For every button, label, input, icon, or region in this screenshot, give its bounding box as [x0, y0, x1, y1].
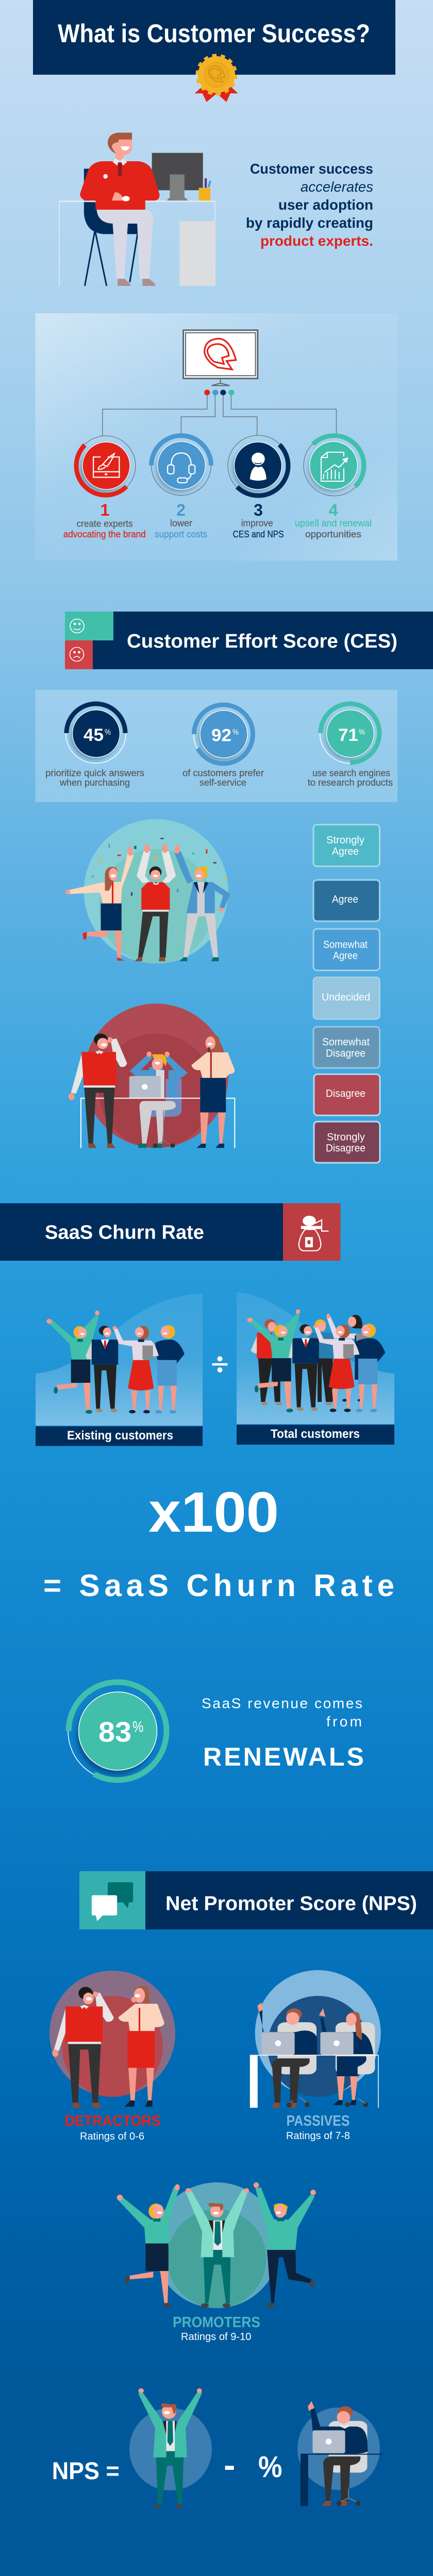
monitor and pencil cup	[152, 153, 211, 200]
renewals text: RENEWALS	[203, 1742, 364, 1771]
NPS title: Net Promoter Score (NPS)	[165, 1893, 417, 1915]
Undecided: Undecided	[322, 992, 370, 1003]
benefit 4 label	[295, 501, 372, 539]
icon: chat bubbles	[92, 1882, 133, 1921]
ring 4: upsell and renewal	[292, 423, 376, 508]
Somewhat Disagree: Somewhat	[322, 1037, 370, 1048]
back row man	[251, 1319, 282, 1405]
chair	[84, 168, 138, 286]
text block: customer success statement: by rapidly creating	[246, 215, 373, 231]
label: detractors: DETRACTORS	[64, 2113, 161, 2129]
icon: coffee grinder	[299, 1216, 328, 1251]
benefit 2 label: lower	[170, 518, 192, 529]
Disagree: Disagree	[326, 1088, 365, 1099]
title banner	[33, 0, 395, 75]
people: four customers	[46, 1311, 185, 1414]
benefit 1 label: 1	[101, 501, 109, 519]
people: seven customers	[247, 1309, 385, 1412]
illustration: man at desk	[59, 133, 215, 286]
Disagree	[314, 1074, 380, 1115]
text block: customer success statement: user adoption	[278, 197, 373, 213]
icon: medal	[195, 56, 238, 102]
Agree: Agree	[332, 894, 358, 905]
illustration: detractors	[49, 1971, 175, 2108]
woman cheering	[65, 846, 134, 961]
label: detractors: Ratings of 0-6	[80, 2131, 144, 2142]
frustrated man	[52, 1987, 114, 2108]
icon: sad face	[70, 647, 84, 662]
illustration: celebrating customers	[65, 819, 230, 963]
renewals text: from	[326, 1714, 362, 1730]
panel: existing customers: Existing customers	[67, 1429, 173, 1443]
stat: 71%: 71	[338, 725, 358, 745]
man with red vest	[69, 1033, 127, 1148]
desk outline	[81, 1098, 235, 1148]
stat: 83 percent from renewals: %	[132, 1719, 143, 1735]
stat: 45%: %	[105, 728, 111, 737]
label: passives	[286, 2113, 350, 2142]
front row	[247, 1309, 385, 1412]
benefit 2 label	[155, 501, 207, 539]
stat: 71%	[308, 703, 393, 788]
man promoter	[186, 2188, 249, 2308]
benefit 3 label: improve	[241, 518, 273, 529]
connector lines and dots	[103, 389, 336, 436]
illustration: frustrated customers	[69, 1004, 235, 1148]
renewals text: SaaS revenue comes	[202, 1696, 362, 1711]
panel: total customers: Total customers	[271, 1427, 360, 1441]
Somewhat Agree	[313, 929, 379, 971]
benefit 4 label: 4	[329, 501, 338, 519]
text block: customer success statement: Customer success	[250, 161, 373, 177]
text block: customer success statement: accelerates	[301, 179, 373, 195]
panel: total customers	[237, 1292, 394, 1445]
Somewhat Agree: Somewhat	[323, 939, 368, 951]
panel: existing customers	[36, 1293, 203, 1446]
Strongly Disagree: Disagree	[326, 1143, 365, 1154]
formula: minus sign	[225, 2466, 234, 2470]
heading: SaaS churn rate	[0, 1204, 340, 1261]
illustration: passives	[250, 1970, 381, 2108]
renewals text	[202, 1696, 364, 1771]
heading: net promoter score	[79, 1871, 433, 1929]
illustration: promoter in formula	[129, 2388, 212, 2508]
benefit 2 label: support costs	[155, 529, 207, 539]
woman biting nails	[191, 1035, 235, 1148]
benefit 4 label: opportunities	[305, 529, 361, 539]
benefit 1 label	[63, 501, 146, 539]
stat: 92%: of customers prefer	[182, 768, 264, 778]
stat: 71%: to research products	[308, 777, 393, 788]
formula: x100: x100	[148, 1481, 279, 1544]
man promoter right	[254, 2182, 316, 2307]
man	[80, 133, 160, 286]
stat: 92%: 92	[211, 726, 231, 745]
text block: customer success statement	[246, 161, 373, 249]
benefit 4 label: upsell and renewal	[295, 518, 372, 529]
label: promoters: Ratings of 9-10	[181, 2331, 252, 2343]
panel: benefits	[36, 313, 397, 561]
heading: customer effort score	[65, 612, 433, 669]
illustration: passive in formula	[297, 2401, 382, 2506]
icon: happy face	[70, 619, 84, 633]
title: What is Customer Success?	[58, 19, 370, 48]
benefit 2 label: 2	[176, 501, 186, 519]
benefit 1 label: create experts	[76, 518, 133, 529]
confetti	[92, 838, 227, 896]
stat: 83 percent from renewals	[68, 1682, 364, 1781]
first passive user	[257, 2003, 317, 2108]
stat: 45%: 45	[84, 725, 104, 745]
stat: 92%: self-service	[199, 777, 246, 788]
desk	[59, 200, 215, 286]
desk	[250, 2055, 378, 2108]
label: promoters: PROMOTERS	[173, 2314, 260, 2331]
back row woman	[326, 1314, 365, 1401]
stat: 45%: prioritize quick answers	[45, 768, 144, 778]
panel: CES statistics	[36, 690, 397, 802]
formula: equals SaaS churn rate: = SaaS Churn Rate	[43, 1568, 394, 1603]
Somewhat Disagree: Disagree	[326, 1048, 365, 1059]
ring 1: create experts	[64, 424, 147, 507]
Strongly Disagree	[314, 1122, 380, 1163]
stat: 83 percent from renewals: 83	[98, 1716, 131, 1748]
ring 2: lower support costs	[152, 436, 211, 496]
label: detractors	[64, 2113, 161, 2142]
label: passives: PASSIVES	[287, 2113, 349, 2129]
ring 3: improve CES and NPS	[216, 423, 301, 508]
back row blue man	[308, 1319, 334, 1405]
stat: 71%: %	[359, 728, 365, 737]
man cheering	[135, 844, 176, 961]
stat: 92%: %	[232, 728, 239, 737]
Agree	[313, 880, 379, 921]
Strongly Agree	[313, 824, 379, 867]
CES title: Customer Effort Score (CES)	[127, 631, 397, 652]
Strongly Disagree: Strongly	[327, 1132, 365, 1143]
stat: 45%	[45, 703, 144, 788]
illustration: promoters	[117, 2182, 316, 2308]
benefit 3 label	[233, 501, 284, 539]
legend: agreement scale	[313, 824, 380, 1163]
formula: percent sign: %	[258, 2450, 282, 2484]
formula: NPS equals: NPS =	[52, 2457, 120, 2484]
stat: 71%: use search engines	[312, 768, 390, 778]
benefit 3 label: 3	[254, 501, 263, 519]
label: passives: Ratings of 7-8	[286, 2130, 350, 2142]
benefit 3 label: CES and NPS	[233, 529, 284, 539]
Strongly Agree: Strongly	[326, 835, 364, 846]
churn title: SaaS Churn Rate	[45, 1222, 204, 1244]
icon: monitor with logo	[184, 330, 258, 385]
icon: divide sign	[212, 1356, 228, 1372]
Somewhat Agree: Agree	[333, 950, 358, 961]
label: promoters	[173, 2314, 260, 2343]
benefit 1 label: advocating the brand	[63, 529, 146, 539]
woman promoter	[117, 2184, 180, 2307]
second passive user	[319, 2008, 375, 2107]
stat: 92%	[182, 704, 264, 788]
Strongly Agree: Agree	[332, 846, 359, 857]
worried woman	[118, 1986, 164, 2107]
man in blue jacket	[175, 845, 230, 961]
seated man with laptop	[129, 1052, 188, 1148]
stat: 45%: when purchasing	[59, 777, 130, 788]
Somewhat Disagree	[313, 1027, 379, 1068]
Undecided	[313, 977, 379, 1019]
text block: customer success statement: product experts.	[260, 233, 373, 249]
